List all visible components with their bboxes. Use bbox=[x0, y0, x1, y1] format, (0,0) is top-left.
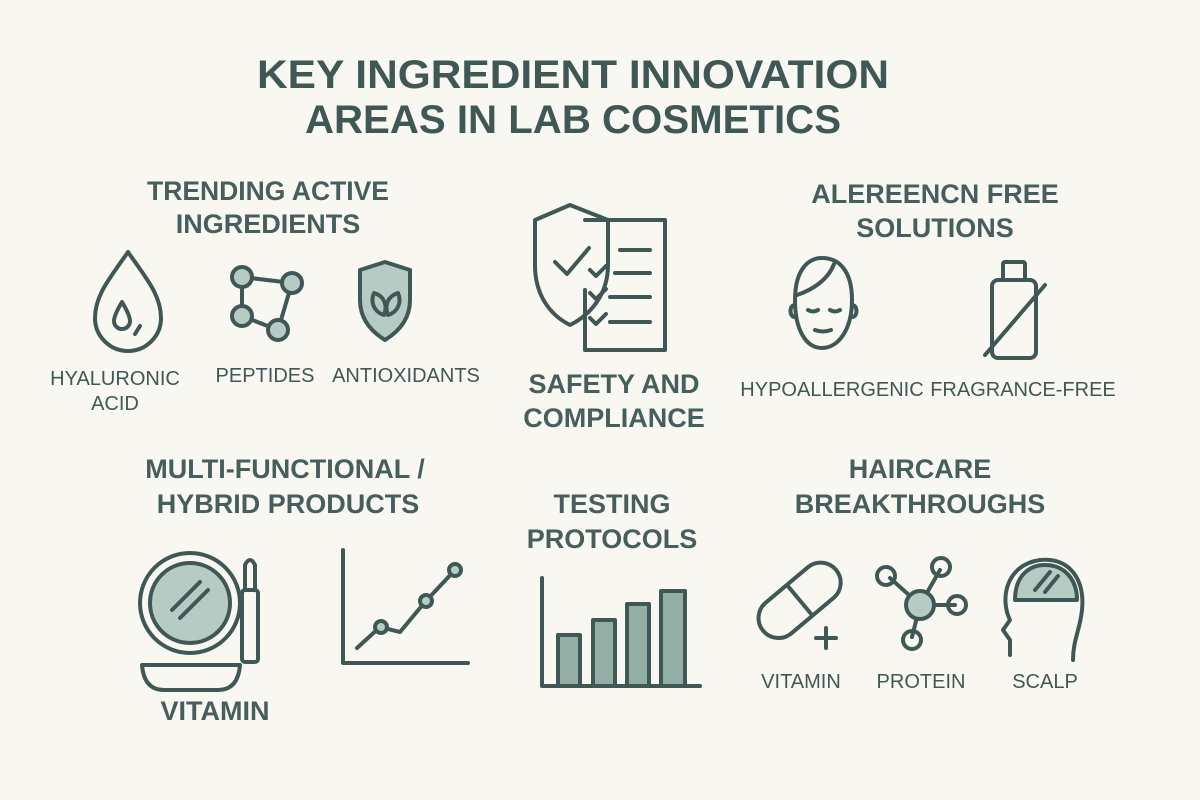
panel: trending active ingredients: ANTIOXIDANTS bbox=[332, 365, 480, 387]
panel: trending active ingredients: PEPTIDES bbox=[216, 365, 314, 387]
icon: scalp head bbox=[1003, 560, 1082, 660]
panel: haircare breakthroughs: VITAMIN bbox=[761, 671, 841, 693]
icon: compact mirror bbox=[140, 553, 258, 690]
labels: HYALURONIC bbox=[50, 368, 180, 390]
panel: testing protocols: PROTOCOLS bbox=[527, 524, 697, 554]
panel: testing protocols bbox=[527, 489, 700, 686]
panel: allergen free solutions: ALEREENCN FREE bbox=[811, 179, 1059, 209]
panel: haircare breakthroughs bbox=[750, 454, 1082, 693]
bar chart bbox=[542, 578, 700, 686]
icon: bottle bbox=[985, 262, 1045, 358]
panel: multi-functional hybrid products: VITAMIN bbox=[160, 696, 270, 726]
icon: peptides bbox=[232, 267, 302, 340]
panel: safety and compliance: COMPLIANCE bbox=[523, 403, 705, 433]
icon: face bbox=[790, 258, 856, 348]
icon: clipboard bbox=[585, 220, 665, 350]
icon: shield bbox=[535, 205, 608, 325]
panel: testing protocols: TESTING bbox=[553, 489, 671, 519]
panel: haircare breakthroughs: HAIRCARE bbox=[849, 454, 991, 484]
panel: safety and compliance: SAFETY AND bbox=[528, 369, 700, 399]
panel: multi-functional hybrid products: HYBRID PRODUCTS bbox=[157, 489, 419, 519]
title: AREAS IN LAB COSMETICS bbox=[305, 98, 841, 142]
panel: multi-functional hybrid products bbox=[140, 454, 468, 726]
icon: pill bbox=[750, 554, 849, 648]
panel: allergen free solutions bbox=[740, 179, 1116, 401]
title: KEY INGREDIENT INNOVATION bbox=[257, 53, 889, 97]
title bbox=[257, 53, 889, 142]
panel: haircare breakthroughs: SCALP bbox=[1012, 671, 1078, 693]
panel: allergen free solutions: HYPOALLERGENIC bbox=[740, 379, 924, 401]
icon: antioxidant shield bbox=[360, 262, 410, 340]
panel: haircare breakthroughs: PROTEIN bbox=[877, 671, 965, 693]
icon: line chart bbox=[343, 550, 468, 663]
panel: safety and compliance bbox=[523, 205, 705, 433]
panel: allergen free solutions: SOLUTIONS bbox=[856, 213, 1014, 243]
panel: allergen free solutions: FRAGRANCE-FREE bbox=[930, 379, 1116, 401]
icon: drop bbox=[95, 252, 161, 351]
panel: multi-functional hybrid products: MULTI-FUNCTIONAL / bbox=[145, 454, 425, 484]
heading: trending: TRENDING ACTIVE bbox=[147, 176, 389, 206]
panel: haircare breakthroughs: BREAKTHROUGHS bbox=[795, 489, 1045, 519]
panel: trending active ingredients bbox=[50, 176, 480, 415]
panel: trending active ingredients: INGREDIENTS bbox=[176, 209, 360, 239]
panel: trending active ingredients: ACID bbox=[91, 393, 139, 415]
icon: protein bbox=[877, 558, 966, 649]
